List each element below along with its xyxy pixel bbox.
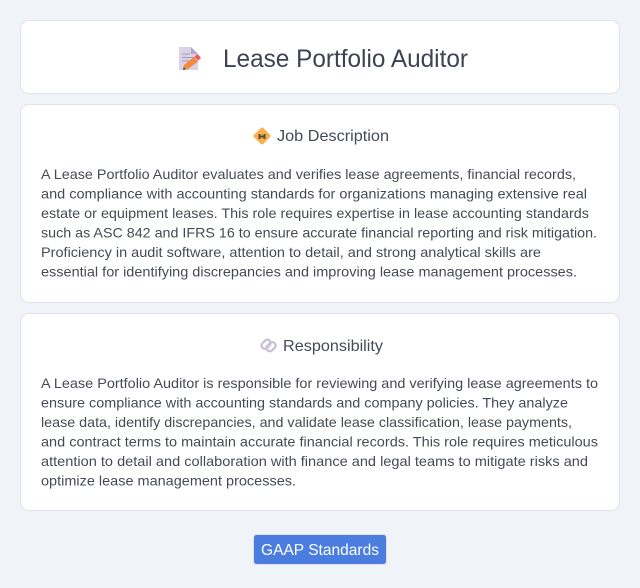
panel: title card xyxy=(20,20,620,94)
text block: job description: Proficiency in audit software, attention to detail, and strong analytical skills are xyxy=(41,244,541,260)
heading: job description: Job Description xyxy=(277,128,389,145)
text block: job description: such as ASC 842 and IFRS 16 to ensure accurate financial reporting and risk mitigation. xyxy=(41,224,597,240)
button: GAAP Standards xyxy=(254,534,386,564)
heading: responsibility: Responsibility xyxy=(283,338,383,355)
text block: responsibility: ensure compliance with accounting standards and company policies. They analyze xyxy=(41,394,568,410)
text block: job description: essential for identifying discrepancies and improving lease management processes. xyxy=(41,264,577,280)
icon: chain link xyxy=(260,338,277,353)
panel: responsibility xyxy=(20,314,620,510)
text block: responsibility: A Lease Portfolio Auditor is responsible for reviewing and verifying lease agreements to xyxy=(41,375,598,391)
icon: document with pencil xyxy=(179,47,201,70)
button: GAAP Standards: GAAP Standards xyxy=(261,542,379,559)
panel: job description xyxy=(20,104,620,302)
title: Lease Portfolio Auditor xyxy=(223,45,468,73)
icon: construction diamond xyxy=(253,127,271,145)
text block: responsibility: lease data, identify discrepancies, and validate lease classification, lease payments, xyxy=(41,414,572,430)
text block: job description: A Lease Portfolio Auditor evaluates and verifies lease agreements, financial records, xyxy=(41,166,576,182)
text block: responsibility: and contract terms to maintain accurate financial records. This role requires meticulous xyxy=(41,434,598,450)
text block: job description xyxy=(41,166,597,280)
text block: responsibility xyxy=(41,375,598,488)
text block: responsibility: attention to detail and collaboration with finance and legal teams to mitigate risks and xyxy=(41,453,588,469)
text block: job description: and compliance with accounting standards for organizations managing extensive real xyxy=(41,186,587,202)
text block: job description: estate or equipment leases. This role requires expertise in lease accounting standards xyxy=(41,205,589,221)
text block: responsibility: optimize lease management processes. xyxy=(41,472,296,488)
